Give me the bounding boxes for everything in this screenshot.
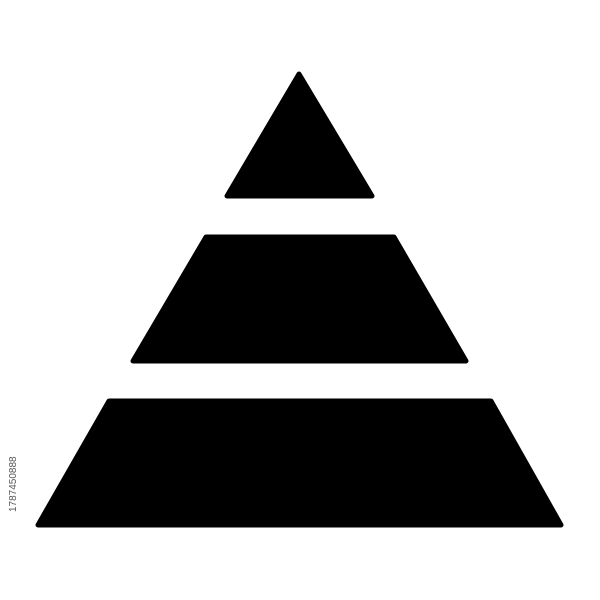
pyramid middle tier: [133, 237, 466, 361]
pyramid top tier: [227, 74, 372, 196]
pyramid bottom tier: [38, 401, 561, 525]
stock id text: 1787450888: [8, 456, 19, 512]
